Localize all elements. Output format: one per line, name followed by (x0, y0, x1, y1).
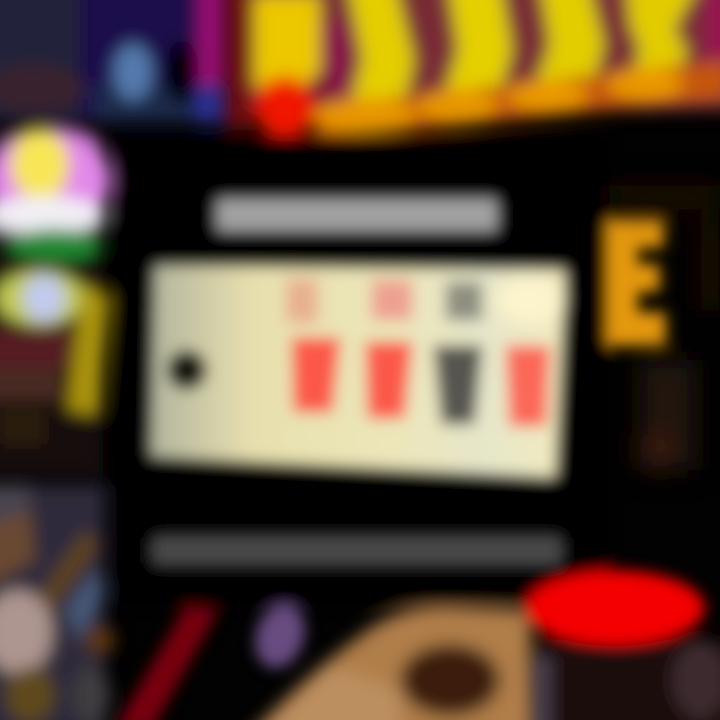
card pip: black circle (168, 351, 206, 389)
caption bar (152, 536, 562, 565)
left side rainbow lights (0, 125, 110, 475)
black screen panel (116, 138, 610, 604)
top marquee with yellow chevrons (226, 0, 720, 140)
red arcade button (525, 570, 720, 720)
right side dark cabinet glow (610, 185, 720, 470)
card 1: red (286, 279, 340, 412)
top-left purple panel (0, 0, 225, 123)
red diagonal stripe (114, 605, 219, 720)
card 4: red (506, 346, 550, 426)
hand at bottom centre (245, 606, 535, 720)
purple blob (247, 597, 313, 675)
playing cards screen (150, 265, 566, 478)
card 2: red (366, 280, 412, 418)
heading bar (216, 198, 498, 232)
orange letter E on right (606, 218, 666, 346)
chevrons (345, 0, 414, 125)
lower left cabinet (0, 485, 115, 720)
orange base (315, 60, 720, 140)
card 3: black (434, 282, 482, 424)
